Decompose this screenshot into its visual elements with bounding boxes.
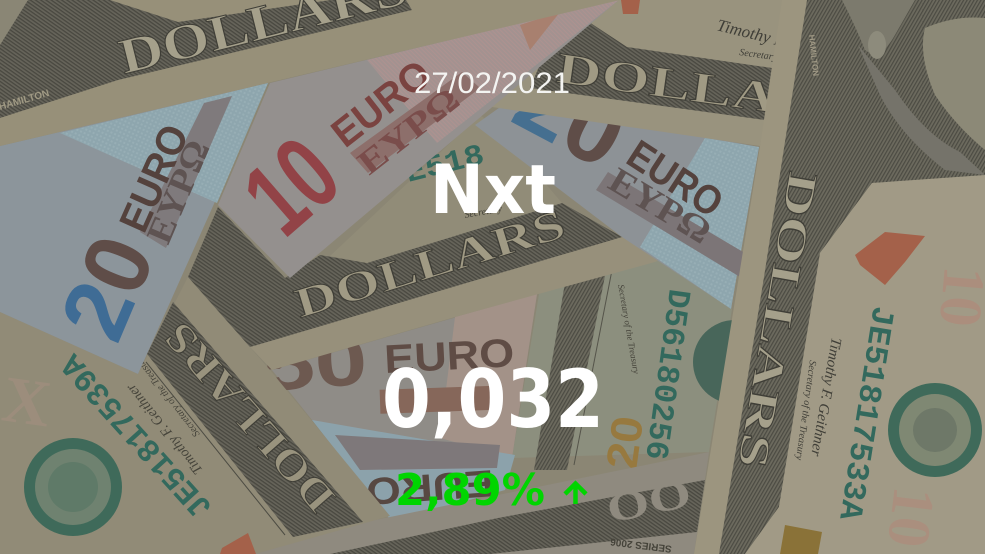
price value: 0,032 [382,353,604,446]
treasury seal [24,438,122,536]
panel: 10 euro note [218,0,620,278]
panel: lower-left dollar note [0,277,390,554]
treasury caption: Secretary of the Treasury [131,352,202,439]
numeral 50: 50 [260,321,370,406]
panel: 20 euro note, right [475,48,760,309]
engraved DOLLARS: DOLLA [554,43,781,123]
red torch mark [220,533,256,554]
percentage change: 2,89% [395,465,545,516]
panel: 50 euro note, centre [260,294,537,522]
upside-down EURO: EURO [365,461,495,512]
engraved DOLLARS: DOLLARS [289,202,571,328]
serial number: JE51817539A [53,345,220,525]
serial number: JE51817533A [830,303,901,523]
signature: Timothy F. [715,15,789,51]
portrait shading [0,0,28,45]
title: Nxt: Nxt [430,151,556,230]
icon: up arrow [565,484,586,504]
panel: top-left dollar note [0,0,620,146]
panel: paper behind the notes with green serial [330,115,562,263]
panel: green-tinted dollar note, centre right [512,240,777,472]
serial number: D56180256 [636,287,697,462]
gold numeral: 20 [597,413,653,472]
serial fragment: E518 [402,139,488,192]
engraved DOLLARS: DOLLARS [728,168,825,472]
treasury caption: Secretary of the Treasury [793,360,818,461]
caption: Secretary [464,203,503,221]
EURO label: EURO [323,52,440,156]
treasury seal [693,320,777,404]
panel: upper right dollar note [492,0,789,146]
EURO label: EURO [383,331,515,382]
gold corner mark [780,525,822,554]
engraved DOLLARS: DOLLARS [156,313,345,521]
panel: bottom dollar note: SERIES 2006 [609,535,672,554]
date: 27/02/2021 [414,67,570,100]
EYPO band [380,386,495,414]
panel: right dollar note with portrait [694,0,985,554]
panel: middle DOLLARS note [188,202,680,370]
EURO label: EURO [110,118,198,239]
EYPO label: EYPΩ [602,160,718,252]
caption: Secretary [739,47,778,63]
numeral 10: 10 [222,115,361,257]
EYPO label: EYPΩ [139,134,218,249]
EYPO label: EYPΩ [351,80,467,182]
signature: Timothy F. Geithner [124,380,206,477]
numeral 20: 20 [42,222,174,354]
red torch mark [855,232,925,285]
note lettering: OO [603,470,695,532]
panel: bottom dollar note [252,452,709,554]
red torch mark [621,0,640,14]
signature: Timothy F. Geithner [807,336,844,458]
pink numerals lower: 10 [875,483,948,551]
EYPO band [350,72,480,173]
portrait: Hamilton [842,0,985,175]
panel: 20 euro note, left [0,83,268,374]
treasury seal [888,383,982,477]
EURO label: EURO [619,131,731,226]
numeral 20: 20 [499,48,642,188]
HAMILTON caption: HAMILTON [807,34,820,77]
signature block: Secretary of the Treasury [616,284,642,375]
